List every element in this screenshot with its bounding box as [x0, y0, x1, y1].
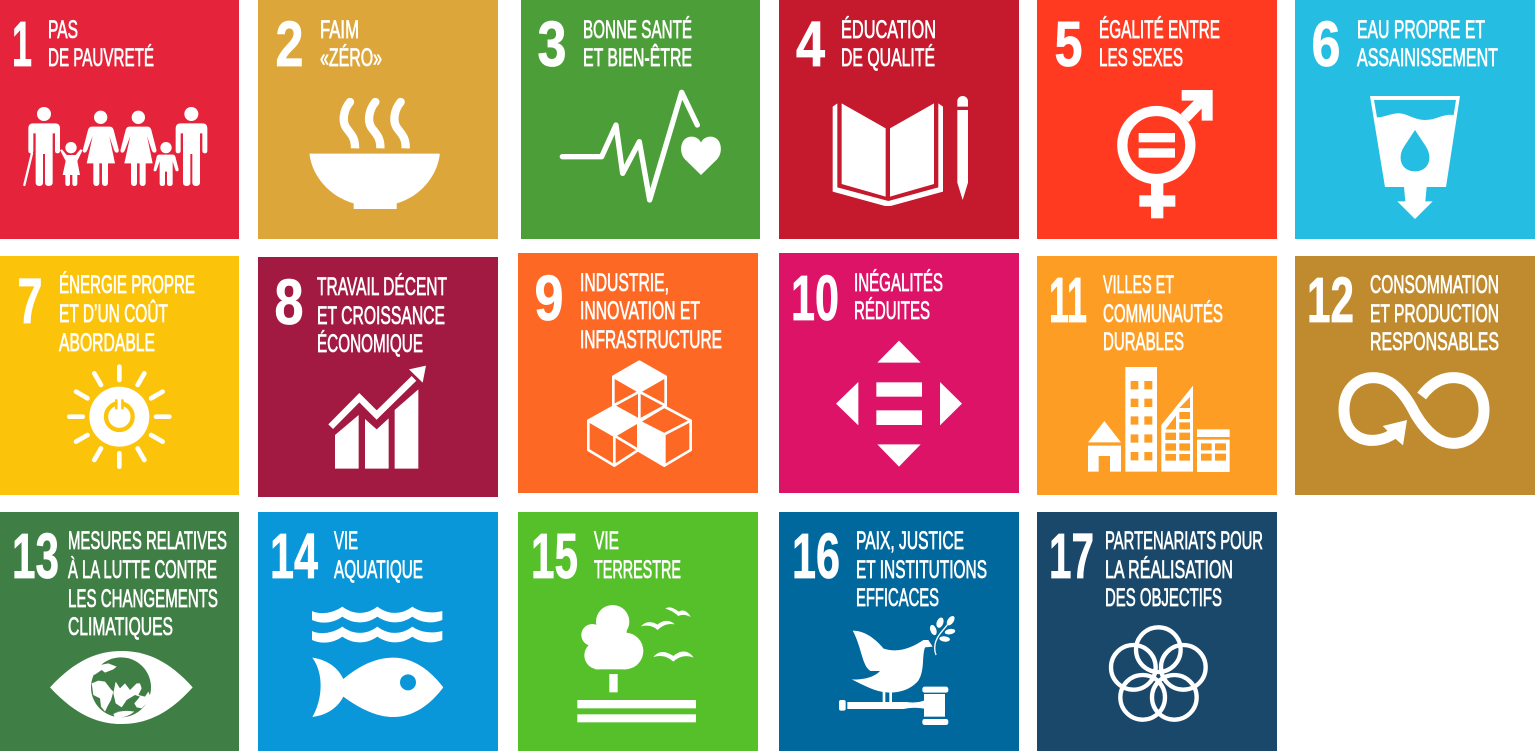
- panel: goal 5: [1037, 0, 1277, 239]
- panel: goal 16: [779, 512, 1019, 751]
- panel: goal 3: [521, 0, 760, 239]
- heading: goal 14: VIE: [334, 527, 358, 555]
- icon: stacked cubes: [588, 362, 691, 466]
- heading: goal 3: BONNE SANTÉ: [583, 15, 692, 44]
- panel: goal 1: [0, 0, 239, 239]
- number 2: 2: [276, 8, 304, 80]
- icon: waves and fish: [312, 607, 443, 717]
- panel: goal 10: [779, 253, 1019, 493]
- heading: goal 14: [334, 527, 423, 584]
- icon: family: [24, 107, 207, 186]
- number 15: 15: [531, 520, 578, 592]
- number 4: 4: [796, 8, 825, 80]
- number 13: 13: [12, 520, 59, 592]
- icon: tree, birds and ground: [577, 605, 696, 722]
- heading: goal 1: DE PAUVRETÉ: [48, 43, 154, 72]
- number 7: 7: [18, 265, 42, 337]
- panel: goal 14: [258, 512, 498, 751]
- heading: goal 2: «ZÉRO»: [320, 43, 382, 72]
- heading: goal 1: [48, 16, 154, 72]
- heading: goal 17: [1105, 527, 1263, 612]
- heading: goal 9: [580, 269, 722, 354]
- heading: goal 7: ABORDABLE: [59, 329, 155, 357]
- heading: goal 11: COMMUNAUTÉS: [1103, 299, 1223, 328]
- number 16: 16: [792, 520, 840, 592]
- heading: goal 11: [1103, 271, 1223, 356]
- icon: growth bars and arrow: [331, 366, 426, 469]
- heading: goal 10: INÉGALITÉS: [854, 268, 943, 297]
- heading: goal 6: [1357, 16, 1498, 72]
- heading: goal 17: PARTENARIATS POUR: [1105, 527, 1263, 555]
- heading: goal 4: DE QUALITÉ: [841, 43, 935, 72]
- heading: goal 11: DURABLES: [1103, 328, 1184, 356]
- heading: goal 5: [1099, 15, 1220, 72]
- icon: dove and gavel: [839, 615, 956, 725]
- heading: goal 10: RÉDUITES: [854, 296, 930, 325]
- heading: goal 14: AQUATIQUE: [334, 556, 423, 584]
- heading: goal 5: ÉGALITÉ ENTRE: [1099, 15, 1220, 44]
- number 5: 5: [1054, 8, 1082, 80]
- icon: inequality arrows: [836, 341, 962, 467]
- number 10: 10: [791, 262, 839, 334]
- number 11: 11: [1049, 264, 1087, 336]
- heading: goal 2: FAIM: [320, 16, 359, 44]
- icon: sun with power button: [69, 367, 169, 467]
- heading: goal 8: ÉCONOMIQUE: [317, 329, 423, 358]
- heading: goal 1: PAS: [48, 16, 78, 44]
- heading: goal 9: INNOVATION ET: [580, 297, 700, 325]
- number 8: 8: [274, 266, 304, 338]
- icon: five interlocking rings: [1111, 627, 1206, 720]
- icon: gender equality symbol: [1122, 90, 1213, 218]
- heading: goal 3: [583, 15, 692, 72]
- heading: goal 16: ET INSTITUTIONS: [856, 556, 987, 584]
- heading: goal 13: LES CHANGEMENTS: [68, 585, 218, 613]
- heading: goal 3: ET BIEN-ÊTRE: [583, 43, 692, 72]
- heading: goal 7: ÉNERGIE PROPRE: [59, 270, 195, 299]
- heading: goal 9: INFRASTRUCTURE: [580, 326, 722, 354]
- heading: goal 12: [1370, 271, 1499, 356]
- heading: goal 15: [594, 527, 681, 584]
- heading: goal 4: [841, 15, 936, 72]
- panel: goal 15: [518, 512, 758, 751]
- heading: goal 7: [59, 270, 195, 357]
- heading: goal 16: [856, 527, 987, 612]
- panel: goal 2: [258, 0, 498, 239]
- heading: goal 13: CLIMATIQUES: [68, 613, 173, 641]
- number 6: 6: [1312, 8, 1340, 80]
- panel: goal 8: [258, 257, 498, 497]
- heading: goal 16: EFFICACES: [856, 584, 939, 612]
- icon: heartbeat and heart: [562, 92, 721, 200]
- heading: goal 13: [68, 527, 227, 641]
- heading: goal 8: TRAVAIL DÉCENT: [317, 272, 447, 301]
- heading: goal 2: [320, 16, 382, 72]
- heading: goal 8: [317, 272, 447, 358]
- heading: goal 13: MESURES RELATIVES: [68, 527, 227, 555]
- panel: goal 12: [1295, 256, 1535, 495]
- number 17: 17: [1049, 520, 1094, 592]
- number 3: 3: [538, 8, 566, 80]
- panel: goal 7: [0, 256, 239, 495]
- number 14: 14: [270, 520, 318, 592]
- panel: goal 17: [1037, 512, 1277, 751]
- icon: eye with globe: [50, 651, 193, 724]
- heading: goal 15: TERRESTRE: [594, 556, 681, 584]
- heading: goal 15: VIE: [594, 527, 619, 555]
- icon: infinity loop arrow: [1344, 378, 1484, 445]
- heading: goal 16: PAIX, JUSTICE: [856, 527, 964, 555]
- heading: goal 17: DES OBJECTIFS: [1105, 584, 1222, 612]
- number 9: 9: [534, 262, 564, 334]
- icon: steaming bowl: [310, 98, 440, 209]
- heading: goal 7: ET D’UN COÛT: [59, 299, 168, 328]
- heading: goal 8: ET CROISSANCE: [317, 302, 445, 330]
- panel: goal 11: [1037, 256, 1277, 495]
- icon: open book and pencil: [833, 96, 968, 206]
- panel: goal 9: [518, 253, 758, 493]
- heading: goal 4: ÉDUCATION: [841, 15, 936, 44]
- heading: goal 5: LES SEXES: [1099, 44, 1183, 72]
- heading: goal 17: LA RÉALISATION: [1105, 555, 1233, 584]
- number 1: 1: [12, 8, 32, 80]
- heading: goal 10: [854, 268, 943, 325]
- icon: city buildings: [1088, 367, 1230, 472]
- heading: goal 13: À LA LUTTE CONTRE: [68, 555, 217, 584]
- heading: goal 9: INDUSTRIE,: [580, 269, 669, 297]
- icon: water glass with drop: [1370, 96, 1460, 219]
- heading: goal 11: VILLES ET: [1103, 271, 1174, 299]
- panel: goal 4: [779, 0, 1019, 239]
- number 12: 12: [1307, 264, 1354, 336]
- panel: goal 13: [0, 512, 239, 751]
- panel: goal 6: [1295, 0, 1535, 239]
